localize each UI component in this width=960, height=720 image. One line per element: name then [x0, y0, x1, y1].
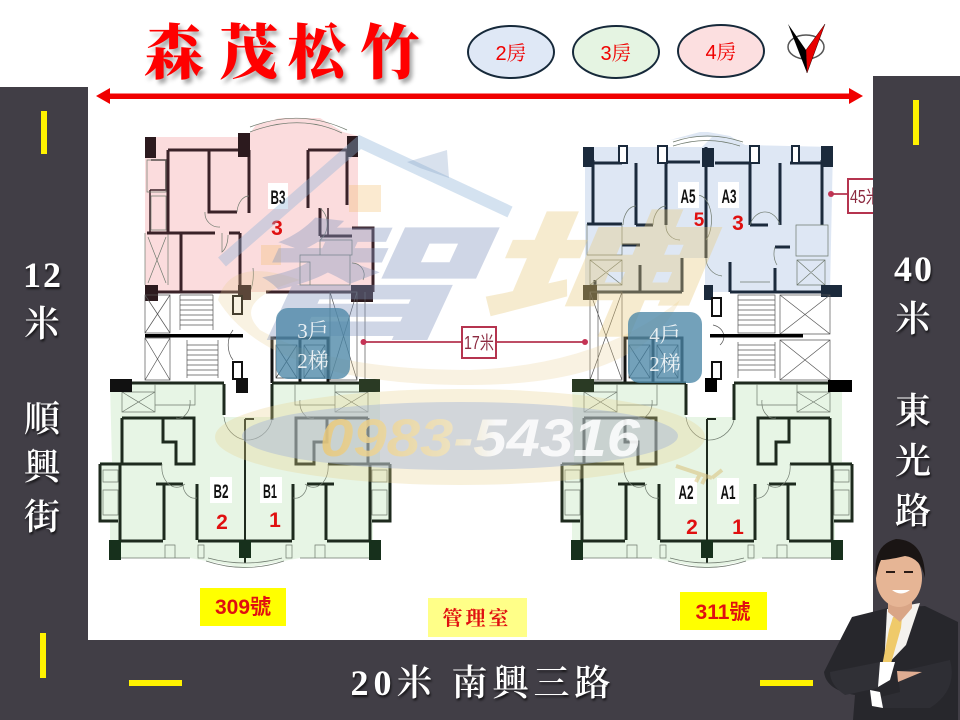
hair	[875, 539, 925, 578]
road label: 12 metres Shunxing Street	[23, 255, 64, 537]
callout: B core 3 units 2 elevators: 2梯	[297, 349, 329, 373]
unit number: A3: 3	[732, 212, 744, 235]
arrow: building width	[96, 88, 863, 104]
unit label: A3	[718, 182, 739, 208]
watermark: key	[676, 466, 722, 484]
dimension: 17 metres	[360, 327, 588, 358]
address tag: 311: 311號	[696, 601, 750, 624]
address tag: 311	[680, 592, 767, 630]
road label: 12 metres Shunxing Street: 米	[24, 304, 61, 344]
address tag: 309: 309號	[215, 596, 271, 619]
neck	[888, 590, 912, 622]
dimension: 17 metres: 17米	[464, 333, 494, 353]
bottom road	[88, 640, 873, 720]
road marking	[40, 633, 46, 678]
road marking	[760, 680, 813, 686]
face details	[886, 571, 913, 573]
road marking	[41, 111, 47, 154]
title: 竹	[360, 21, 420, 87]
crossed arms	[830, 662, 887, 695]
unit label: B1	[260, 477, 282, 503]
unit number: A2: 2	[686, 516, 698, 539]
core: stairs and elevators B	[145, 292, 365, 383]
unit label: A2: A2	[678, 483, 694, 504]
shirt	[884, 603, 920, 668]
unit label: B3	[268, 183, 288, 209]
unit number: A5: 5	[694, 210, 705, 231]
legend: 4 rooms: 4房	[705, 41, 737, 64]
legend: 3 rooms	[573, 26, 659, 78]
watermark: phone number: 0983-54316	[320, 409, 641, 468]
title: 松	[287, 21, 351, 87]
unit number: B1: 1	[269, 509, 281, 532]
management office tag	[428, 598, 527, 637]
dimension: 45 metres	[828, 179, 880, 213]
floor plan: B3 unit	[145, 118, 373, 302]
road marking	[129, 680, 182, 686]
watermark: brand character blue: 智	[233, 213, 500, 356]
unit number: A1: 1	[732, 516, 744, 539]
road label: 12 metres Shunxing Street: 街	[24, 497, 60, 537]
unit label: A1: A1	[720, 483, 736, 504]
title	[144, 21, 420, 87]
road label: 40 metres Dongguang Road: 40	[894, 249, 934, 289]
title: 森	[144, 21, 204, 87]
watermark: brand character gold: 坤	[470, 203, 724, 353]
road label: 40 metres Dongguang Road: 路	[895, 491, 931, 531]
floor plan: B2 and B1 units	[100, 378, 390, 568]
watermark: swoosh	[215, 271, 705, 485]
left road	[0, 87, 88, 720]
watermark: house roof	[222, 142, 510, 265]
unit label: B2	[210, 477, 232, 503]
callout: A core 4 units 2 elevators	[628, 312, 702, 383]
unit number: B3: 3	[271, 217, 283, 240]
road label: 12 metres Shunxing Street: 興	[24, 447, 64, 487]
unit label: A1	[717, 478, 739, 504]
unit label: B3: B3	[270, 188, 286, 209]
legend: 4 rooms	[678, 25, 764, 77]
road label: 40 metres Dongguang Road: 東	[895, 391, 931, 431]
unit label: B1: B1	[263, 482, 277, 503]
road label: 12 metres Shunxing Street: 12	[23, 255, 63, 295]
unit label: A3: A3	[722, 187, 736, 208]
dimension: 45 metres: 45米	[850, 187, 880, 207]
head	[876, 549, 922, 607]
unit label: A5: A5	[680, 187, 696, 208]
right road	[873, 76, 960, 720]
road marking	[913, 100, 919, 145]
address tag: 309	[200, 588, 286, 626]
road label: 20 metres Nanxing 3rd Road: 20米 南興三路	[350, 663, 616, 703]
floor plan: A2 and A1 units	[562, 378, 852, 568]
callout: A core 4 units 2 elevators: 2梯	[649, 352, 681, 376]
core: stairs and elevators A	[590, 292, 830, 383]
agent photo	[824, 539, 958, 720]
road label: 40 metres Dongguang Road: 米	[895, 299, 932, 339]
management office tag: 管理室	[442, 606, 512, 630]
unit label: A5	[678, 182, 699, 208]
legend: 2 rooms	[468, 26, 554, 78]
floor plan: A5 and A3 units	[583, 132, 842, 300]
road label: 40 metres Dongguang Road: 光	[895, 441, 931, 481]
title: 茂	[219, 21, 279, 87]
icon: V logo	[788, 24, 825, 73]
callout: B core 3 units 2 elevators: 3户	[297, 319, 329, 343]
callout: B core 3 units 2 elevators	[276, 308, 350, 379]
watermark: house logo and brand	[215, 142, 724, 485]
callout: A core 4 units 2 elevators: 4户	[649, 323, 681, 347]
legend: 2 rooms: 2房	[495, 42, 527, 65]
legend: room types	[468, 25, 764, 78]
road label: 12 metres Shunxing Street: 順	[24, 399, 61, 439]
unit number: B2: 2	[216, 511, 228, 534]
road label: 40 metres Dongguang Road	[894, 249, 934, 531]
tie	[882, 617, 902, 667]
unit label: B2: B2	[214, 482, 228, 503]
unit label: A2	[675, 478, 697, 504]
suit	[824, 606, 958, 720]
legend: 3 rooms: 3房	[600, 42, 632, 65]
